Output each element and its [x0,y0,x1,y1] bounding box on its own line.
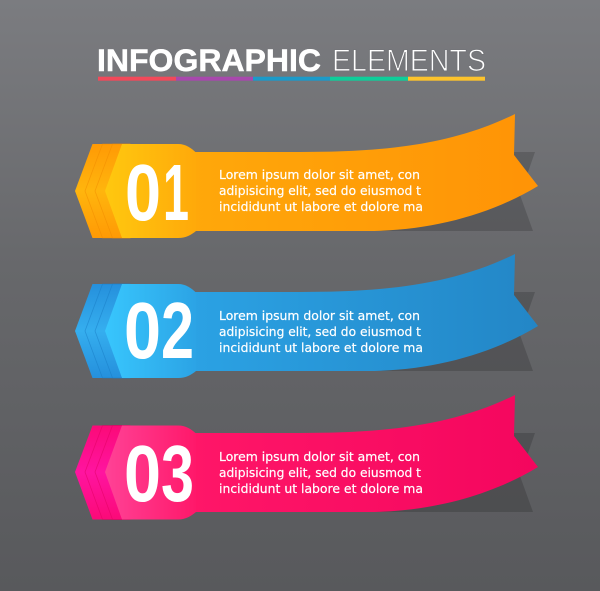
number [124,429,194,518]
text block: incididunt ut labore et dolore ma [219,341,423,356]
text block: incididunt ut labore et dolore ma [219,482,423,497]
number: 2 [161,286,194,375]
title [97,42,486,78]
chevron layers [75,426,130,520]
number: 1 [163,148,189,237]
title: infographic: INFOGRAPHIC [97,42,321,78]
number: 0 [125,148,161,237]
panel: banner 03 [75,395,538,520]
panel: banner 02 [75,254,538,378]
chevron layers [75,144,130,238]
text block: Lorem ipsum dolor sit amet, con [219,450,420,465]
number: 3 [161,429,194,518]
text block: adipisicing elit, sed do eiusmod t [219,184,421,199]
chevron layers [75,284,130,378]
text block: adipisicing elit, sed do eiusmod t [219,325,421,340]
number: 0 [124,286,161,375]
number badge [105,144,196,238]
number [125,148,189,237]
text block: Lorem ipsum dolor sit amet, con [219,168,420,183]
text block [219,168,423,215]
text block [219,450,423,497]
ribbon shadow [330,292,535,371]
ribbon shadow [330,152,535,231]
panel: banner 01 [75,114,538,238]
ribbon [190,114,538,231]
number [124,286,194,375]
text block [219,309,423,356]
text block: incididunt ut labore et dolore ma [219,200,423,215]
title colour bar [98,77,485,81]
ribbon [190,254,538,371]
title: elements: ELEMENTS [332,42,486,78]
number: 0 [124,429,161,518]
number badge [105,284,196,378]
number badge [105,426,196,520]
ribbon [190,395,538,512]
text block: adipisicing elit, sed do eiusmod t [219,466,421,481]
ribbon shadow [330,433,535,512]
text block: Lorem ipsum dolor sit amet, con [219,309,420,324]
